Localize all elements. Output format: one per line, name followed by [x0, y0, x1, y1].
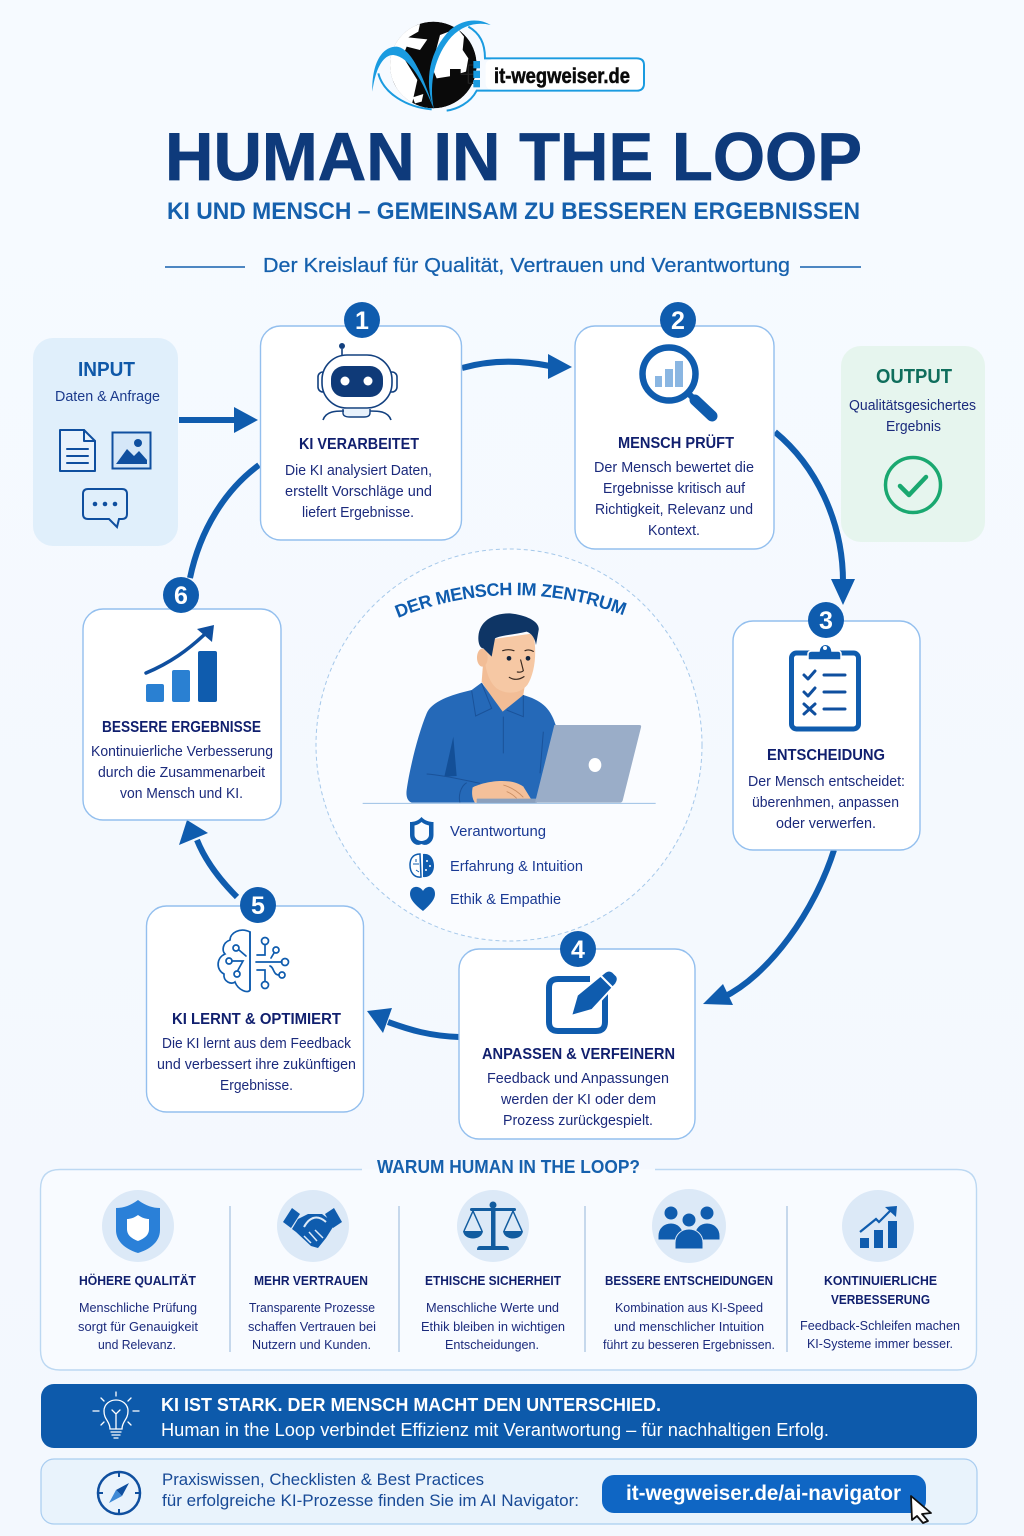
step 4 text: Feedback und Anpassungen: [487, 1071, 669, 1087]
step 3 text: [748, 774, 905, 832]
heading: VERBESSERUNG: [831, 1292, 930, 1307]
icon: check circle: [886, 458, 940, 512]
step 3 text: oder verwerfen.: [776, 816, 876, 832]
icon: clipboard: [792, 644, 858, 729]
step 6 text: durch die Zusammenarbeit: [98, 765, 265, 781]
badge 3: 3: [819, 607, 833, 635]
text: [78, 1300, 198, 1352]
heading: [824, 1273, 937, 1307]
icon: chat bubble: [83, 489, 127, 527]
step 2 text: Ergebnisse kritisch auf: [603, 481, 746, 497]
arrow: step 1 to step 2: [462, 354, 572, 379]
badge 6: [163, 577, 199, 613]
text: Transparente Prozesse: [249, 1300, 375, 1315]
heading: BESSERE ENTSCHEIDUNGEN: [605, 1273, 773, 1288]
panel: warum human in the loop: [40, 1157, 976, 1370]
icon: image: [112, 432, 150, 468]
step 3 heading: ENTSCHEIDUNG: [767, 747, 885, 764]
icon: heart: [410, 887, 435, 911]
panel: center circle: [316, 548, 702, 942]
badge 2: [660, 302, 696, 338]
arrow: step 3 to step 4: [703, 850, 834, 1005]
banner text: Human in the Loop verbindet Effizienz mit Verantwortung – für nachhaltigen Erfolg.: [161, 1420, 829, 1440]
step 6 text: [91, 744, 273, 802]
text: [421, 1300, 565, 1352]
output heading: OUTPUT: [876, 366, 952, 388]
step 5 text: und verbessert ihre zukünftigen: [157, 1057, 356, 1073]
badge 5: 5: [251, 892, 265, 920]
arrow: step 6 to step 1: [190, 465, 259, 578]
label: Verantwortung: Verantwortung: [450, 823, 546, 840]
step 5 text: Die KI lernt aus dem Feedback: [162, 1036, 352, 1052]
panel: step 2 Mensch prueft: [575, 302, 774, 549]
text: führt zu besseren Ergebnissen.: [603, 1337, 775, 1352]
badge 1: 1: [355, 307, 369, 335]
output text: Qualitätsgesichertes: [849, 398, 976, 414]
heading: KONTINUIERLICHE: [824, 1273, 937, 1288]
text: KI-Systeme immer besser.: [807, 1336, 953, 1351]
step 4 heading: ANPASSEN & VERFEINERN: [482, 1046, 675, 1063]
text: Menschliche Werte und: [426, 1300, 559, 1315]
panel: step 5 KI lernt: [146, 887, 364, 1112]
step 1 text: [285, 463, 432, 521]
input heading: INPUT: [78, 359, 135, 381]
benefit: ethische sicherheit: [421, 1190, 565, 1352]
panel: input: [33, 338, 178, 546]
step 5 heading: KI LERNT & OPTIMIERT: [172, 1011, 341, 1028]
logo: it-wegweiser.de: it-wegweiser.de: [494, 65, 630, 88]
step 5 text: Ergebnisse.: [220, 1078, 293, 1094]
step 2 text: Kontext.: [648, 523, 700, 539]
step 6 text: Kontinuierliche Verbesserung: [91, 744, 273, 760]
step 2 text: Der Mensch bewertet die: [594, 460, 754, 476]
text: schaffen Vertrauen bei: [248, 1319, 376, 1334]
text: [248, 1300, 376, 1352]
panel: output: [841, 346, 985, 542]
heading: ETHISCHE SICHERHEIT: [425, 1273, 561, 1288]
icon: rising bar chart: [146, 625, 217, 702]
icon: document: [60, 430, 95, 471]
label: Erfahrung und Intuition: Erfahrung & Intuition: [450, 858, 583, 875]
step 6 text: von Mensch und KI.: [120, 786, 243, 802]
icon: light bulb: [93, 1392, 139, 1438]
label: Ethik und Empathie: Ethik & Empathie: [450, 891, 561, 908]
arrow: input to step 1: [179, 407, 258, 433]
badge 4: [560, 931, 596, 967]
text: Ethik bleiben in wichtigen: [421, 1319, 565, 1334]
panel heading: WARUM HUMAN IN THE LOOP?: [377, 1157, 640, 1177]
text: Feedback-Schleifen machen: [800, 1318, 960, 1333]
heading: HÖHERE QUALITÄT: [79, 1273, 196, 1288]
text: [800, 1318, 960, 1351]
logo: it-wegweiser.de: [370, 20, 644, 111]
icon: people: [658, 1206, 720, 1249]
text: Nutzern und Kunden.: [252, 1337, 371, 1352]
output text: [849, 398, 976, 435]
badge 3: [808, 602, 844, 638]
badge 6: 6: [174, 582, 188, 610]
footer: AI navigator link: [41, 1459, 977, 1524]
title: HUMAN IN THE LOOP: [165, 119, 862, 195]
panel: step 4 Anpassen: [459, 931, 695, 1139]
icon: shield: [410, 817, 434, 845]
arrow: step 5 to step 6: [179, 820, 237, 897]
icon: brain circuit: [218, 930, 288, 992]
arrow: step 4 to step 5: [367, 1008, 459, 1037]
step 1 text: erstellt Vorschläge und: [285, 484, 432, 500]
badge 1: [344, 302, 380, 338]
step 4 text: Prozess zurückgespielt.: [503, 1113, 653, 1129]
badge 4: 4: [571, 936, 585, 964]
step 3 text: Der Mensch entscheidet:: [748, 774, 905, 790]
icon: handshake: [283, 1208, 342, 1248]
text: Menschliche Prüfung: [79, 1300, 197, 1315]
step 3 text: überenhmen, anpassen: [752, 795, 899, 811]
text: und menschlicher Intuition: [614, 1319, 764, 1334]
badge 2: 2: [671, 307, 685, 335]
text: [603, 1300, 775, 1352]
panel: step 3 Entscheidung: [733, 602, 920, 850]
footer text: [162, 1470, 579, 1510]
icon: brain: [410, 854, 434, 877]
icon: cursor: [911, 1496, 931, 1523]
banner heading: KI IST STARK. DER MENSCH MACHT DEN UNTERSCHIED.: [161, 1395, 661, 1415]
text: Kombination aus KI-Speed: [615, 1300, 763, 1315]
step 1 text: Die KI analysiert Daten,: [285, 463, 432, 479]
benefit: hoehere qualitaet: [78, 1190, 198, 1352]
step 2 heading: MENSCH PRÜFT: [618, 433, 734, 452]
badge 5: [240, 887, 276, 923]
curved heading: DER MENSCH IM ZENTRUM: [394, 582, 627, 618]
arrow: step 2 to step 3: [775, 432, 855, 605]
banner: key message: [41, 1384, 977, 1448]
icon: robot: [318, 343, 397, 420]
button: [602, 1475, 926, 1513]
step 4 text: werden der KI oder dem: [500, 1092, 656, 1108]
icon: magnifier: [642, 348, 712, 416]
output text: Ergebnis: [886, 419, 941, 435]
benefit: kontinuierliche verbesserung: [800, 1190, 960, 1351]
panel: step 6 Bessere Ergebnisse: [83, 577, 281, 820]
text: Entscheidungen.: [445, 1337, 539, 1352]
benefit: bessere entscheidungen: [603, 1189, 775, 1352]
icon: shield: [116, 1200, 160, 1253]
step 6 heading: BESSERE ERGEBNISSE: [102, 719, 261, 736]
subtitle: KI UND MENSCH – GEMEINSAM ZU BESSEREN ERGEBNISSEN: [167, 198, 860, 225]
icon: growth chart: [860, 1206, 897, 1248]
step 2 text: Richtigkeit, Relevanz und: [595, 502, 753, 518]
icon: scales: [463, 1202, 523, 1250]
tagline: Der Kreislauf für Qualität, Vertrauen und Verantwortung: [263, 255, 790, 277]
step 4 text: [487, 1071, 669, 1129]
text: sorgt für Genauigkeit: [78, 1319, 198, 1334]
heading: MEHR VERTRAUEN: [254, 1273, 368, 1288]
panel: step 1 KI verarbeitet: [260, 302, 462, 540]
icon: pencil on square: [549, 970, 618, 1031]
step 5 text: [157, 1036, 356, 1094]
illustration: person at laptop: [363, 613, 656, 803]
step 2 text: [594, 460, 754, 539]
text: und Relevanz.: [98, 1337, 176, 1352]
footer text: für erfolgreiche KI-Prozesse finden Sie im AI Navigator:: [162, 1491, 579, 1510]
button: it-wegweiser.de/ai-navigator: [626, 1482, 901, 1505]
step 1 heading: KI VERARBEITET: [299, 436, 419, 453]
icon: compass: [98, 1472, 140, 1514]
input text: Daten & Anfrage: [55, 389, 160, 405]
step 1 text: liefert Ergebnisse.: [302, 505, 414, 521]
benefit: mehr vertrauen: [248, 1190, 376, 1352]
footer text: Praxiswissen, Checklisten & Best Practices: [162, 1470, 484, 1489]
